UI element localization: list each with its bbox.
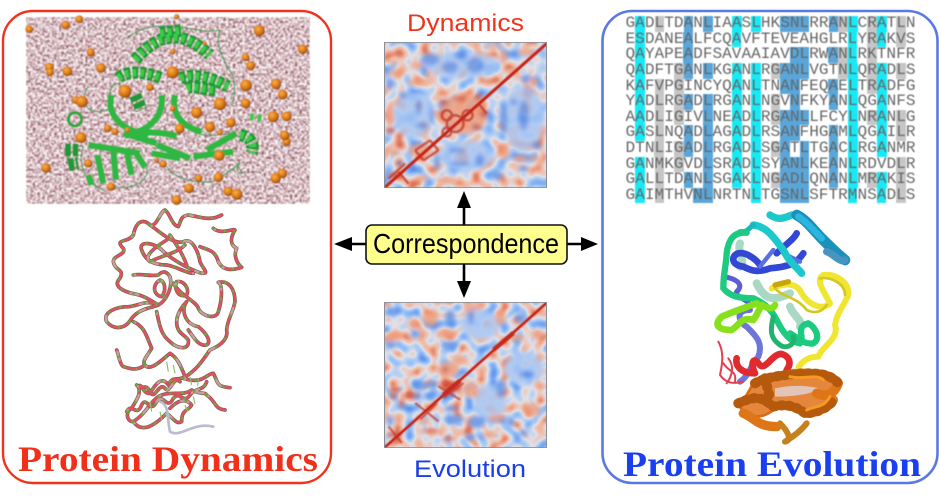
sequence alignment with conservation highlighting: L [654, 139, 664, 157]
sequence alignment with conservation highlighting: L [848, 92, 858, 110]
sequence alignment with conservation highlighting: L [896, 108, 906, 126]
sequence alignment with conservation highlighting: N [838, 61, 848, 79]
sequence alignment with conservation highlighting: A [732, 30, 741, 48]
sequence alignment with conservation highlighting: S [635, 30, 645, 48]
sequence alignment with conservation highlighting: ADL [780, 170, 809, 188]
image: protein backbone ensemble with green side chains [106, 210, 242, 433]
sequence alignment with conservation highlighting: G I THV NRTN TG SFTR NS D S [626, 186, 915, 204]
sequence alignment with conservation highlighting: G D TD N IA S HK RR C T N [626, 14, 916, 32]
sequence alignment with conservation highlighting: A [877, 77, 887, 95]
sequence alignment with conservation highlighting: A [780, 139, 790, 157]
sequence alignment with conservation highlighting: L [751, 139, 761, 157]
sequence alignment with conservation highlighting: A [635, 108, 645, 126]
sequence alignment with conservation highlighting: DTN I D RG D S T TG C RG NMR [626, 139, 916, 157]
sequence alignment with conservation highlighting: A [828, 45, 838, 63]
sequence alignment with conservation highlighting: L [751, 170, 761, 188]
sequence alignment with conservation highlighting: A [829, 14, 838, 32]
sequence alignment with conservation highlighting: A [635, 77, 645, 95]
sequence alignment with conservation highlighting: L [655, 92, 664, 110]
sequence alignment with conservation highlighting: L [751, 77, 761, 95]
sequence alignment with conservation highlighting: L [655, 108, 664, 126]
sequence alignment with conservation highlighting: A [829, 92, 838, 110]
sequence alignment with conservation highlighting: L [848, 77, 858, 95]
sequence alignment with conservation highlighting: L [848, 139, 858, 157]
label: Dynamics: Dynamics [407, 10, 524, 37]
panel: protein dynamics frame [3, 11, 331, 483]
sequence alignment with conservation highlighting: L [703, 139, 713, 157]
sequence alignment with conservation highlighting: A [877, 139, 887, 157]
sequence alignment with conservation highlighting: A [732, 92, 742, 110]
sequence alignment with conservation highlighting: G S NQ D AG D RS FHG M QG I R [626, 123, 916, 141]
sequence alignment with conservation highlighting: A [635, 45, 645, 63]
sequence alignment with conservation highlighting: Y D R D RG N N V FKY N QG NFS [626, 92, 916, 110]
sequence alignment with conservation highlighting: V [896, 30, 906, 48]
sequence alignment with conservation highlighting: A [732, 155, 742, 173]
sequence alignment with conservation highlighting: M [848, 186, 857, 204]
image: rainbow protein structure ensemble [718, 215, 848, 442]
sequence alignment with conservation highlighting: L [751, 108, 761, 126]
sequence alignment with conservation highlighting: G [771, 108, 780, 126]
sequence alignment with conservation highlighting: L [848, 108, 858, 126]
sequence alignment with conservation highlighting: R [867, 170, 877, 188]
sequence alignment with conservation highlighting: A [877, 170, 887, 188]
sequence alignment with conservation highlighting: A [684, 14, 693, 32]
sequence alignment with conservation highlighting: E DANE LFCQ VFTEVEAHGLR Y K S [626, 30, 915, 48]
sequence alignment with conservation highlighting: R [867, 108, 877, 126]
sequence alignment with conservation highlighting: A [732, 123, 742, 141]
sequence alignment with conservation highlighting: L [848, 30, 857, 48]
sequence alignment with conservation highlighting: L [800, 139, 809, 157]
sequence alignment with conservation highlighting: DL [790, 45, 809, 63]
sequence alignment with conservation highlighting: Q DFT N KG N R VGT Q D S [626, 61, 916, 79]
heatmap: evolution correlation matrix [384, 302, 547, 448]
sequence alignment with conservation highlighting: V [655, 77, 664, 95]
heatmap: dynamics correlation matrix [384, 42, 547, 188]
arrow: down [457, 263, 471, 298]
sequence alignment with conservation highlighting: L [703, 61, 713, 79]
sequence alignment with conservation highlighting: AN [780, 123, 800, 141]
sequence alignment with conservation highlighting: A [829, 170, 838, 188]
sequence alignment with conservation highlighting: A [732, 108, 742, 126]
sequence alignment with conservation highlighting: A [635, 155, 645, 173]
sequence alignment with conservation highlighting: A [732, 14, 742, 32]
sequence alignment with conservation highlighting: G [771, 170, 780, 188]
sequence alignment with conservation highlighting: A D I IV NE D R LFCY N N G [626, 108, 916, 126]
sequence alignment with conservation highlighting: A [684, 170, 693, 188]
sequence alignment with conservation highlighting: A [635, 14, 645, 32]
sequence alignment with conservation highlighting: L [751, 123, 761, 141]
sequence alignment with conservation highlighting: AN [780, 77, 800, 95]
sequence alignment with conservation highlighting: L [896, 14, 906, 32]
arrow: up [457, 191, 471, 226]
sequence alignment with conservation highlighting [625, 14, 916, 204]
sequence alignment with conservation highlighting: A [828, 77, 838, 95]
sequence alignment with conservation highlighting: A [732, 61, 742, 79]
sequence alignment with conservation highlighting: A [635, 123, 645, 141]
sequence alignment with conservation highlighting: I [896, 170, 906, 188]
callout: Correspondence: Correspondence [373, 228, 559, 259]
sequence alignment with conservation highlighting: G N K VD SR D SY KE N RDVD R [626, 155, 916, 173]
sequence alignment with conservation highlighting: L [703, 14, 713, 32]
arrow: right [566, 237, 598, 251]
sequence alignment with conservation highlighting: G L TD N SG K N QN N M K S [626, 170, 916, 188]
sequence alignment with conservation highlighting: G [674, 77, 684, 95]
sequence alignment with conservation highlighting: N [838, 14, 848, 32]
sequence alignment with conservation highlighting: K F P INCYQ N TN FEQ E T DFG [626, 77, 916, 95]
sequence alignment with conservation highlighting: L [848, 14, 858, 32]
sequence alignment with conservation highlighting: A [684, 61, 693, 79]
sequence alignment with conservation highlighting: A [829, 155, 838, 173]
sequence alignment with conservation highlighting: A [877, 123, 887, 141]
sequence alignment with conservation highlighting: L [848, 170, 858, 188]
sequence alignment with conservation highlighting: L [703, 92, 713, 110]
sequence alignment with conservation highlighting: L [896, 155, 906, 173]
sequence alignment with conservation highlighting: A [732, 77, 742, 95]
sequence alignment with conservation highlighting: L [896, 186, 906, 204]
sequence alignment with conservation highlighting: L [848, 123, 858, 141]
sequence alignment with conservation highlighting: L [751, 186, 761, 204]
sequence alignment with conservation highlighting: A [877, 186, 886, 204]
sequence alignment with conservation highlighting: G [771, 92, 780, 110]
sequence alignment with conservation highlighting: G [674, 61, 684, 79]
sequence alignment with conservation highlighting: A [684, 139, 693, 157]
sequence alignment with conservation highlighting: Q YAPE DFSAVAAIAV RW R TNFR [626, 45, 915, 63]
sequence alignment with conservation highlighting: G [771, 61, 780, 79]
image: solvated protein with ions [25, 14, 310, 205]
sequence alignment with conservation highlighting: L [703, 108, 713, 126]
sequence alignment with conservation highlighting: ANL [780, 155, 809, 173]
sequence alignment with conservation highlighting: R [867, 61, 877, 79]
sequence alignment with conservation highlighting: L [751, 14, 761, 32]
sequence alignment with conservation highlighting: A [635, 186, 645, 204]
sequence alignment with conservation highlighting: A [683, 45, 693, 63]
sequence alignment with conservation highlighting: A [635, 170, 645, 188]
sequence alignment with conservation highlighting: A [877, 30, 886, 48]
sequence alignment with conservation highlighting: N [790, 92, 800, 110]
sequence alignment with conservation highlighting: L [848, 45, 857, 63]
sequence alignment with conservation highlighting: L [655, 123, 664, 141]
sequence alignment with conservation highlighting: M [655, 155, 664, 173]
sequence alignment with conservation highlighting: L [751, 92, 761, 110]
sequence alignment with conservation highlighting: A [877, 61, 887, 79]
sequence alignment with conservation highlighting: A [635, 92, 645, 110]
sequence alignment with conservation highlighting: A [683, 30, 693, 48]
title: Protein Dynamics: Protein Dynamics [18, 439, 318, 479]
sequence alignment with conservation highlighting: A [877, 92, 887, 110]
sequence alignment with conservation highlighting: A [732, 139, 742, 157]
sequence alignment with conservation highlighting: L [655, 14, 664, 32]
sequence alignment with conservation highlighting: G [674, 139, 684, 157]
sequence alignment with conservation highlighting: ANL [780, 61, 809, 79]
sequence alignment with conservation highlighting: SNL [780, 186, 809, 204]
sequence alignment with conservation highlighting: G [674, 92, 684, 110]
sequence alignment with conservation highlighting: M [655, 186, 664, 204]
arrow: left [334, 237, 367, 251]
sequence alignment with conservation highlighting: SNL [780, 14, 809, 32]
sequence alignment with conservation highlighting: L [896, 61, 906, 79]
sequence alignment with conservation highlighting: L [703, 155, 713, 173]
sequence alignment with conservation highlighting: N [838, 45, 848, 63]
sequence alignment with conservation highlighting: A [829, 123, 838, 141]
sequence alignment with conservation highlighting: G [674, 108, 684, 126]
sequence alignment with conservation highlighting: G [771, 139, 780, 157]
sequence alignment with conservation highlighting: G [674, 155, 684, 173]
sequence alignment with conservation highlighting: A [684, 92, 693, 110]
sequence alignment with conservation highlighting: L [848, 61, 858, 79]
sequence alignment with conservation highlighting: A [877, 14, 887, 32]
sequence alignment with conservation highlighting: L [848, 155, 858, 173]
sequence alignment with conservation highlighting: L [703, 123, 713, 141]
sequence alignment with conservation highlighting: R [867, 77, 877, 95]
sequence alignment with conservation highlighting: R [867, 30, 877, 48]
title: Protein Evolution: Protein Evolution [623, 444, 921, 484]
sequence alignment with conservation highlighting: L [703, 170, 713, 188]
panel: protein evolution frame [602, 11, 938, 483]
sequence alignment with conservation highlighting: L [896, 123, 906, 141]
sequence alignment with conservation highlighting: ANL [780, 108, 809, 126]
label: Evolution: Evolution [414, 456, 526, 483]
sequence alignment with conservation highlighting: A [877, 108, 887, 126]
sequence alignment with conservation highlighting: L [751, 61, 761, 79]
sequence alignment with conservation highlighting: K [867, 45, 877, 63]
sequence alignment with conservation highlighting: NL [693, 186, 712, 204]
sequence alignment with conservation highlighting: L [751, 155, 761, 173]
sequence alignment with conservation highlighting: A [635, 61, 645, 79]
sequence alignment with conservation highlighting: A [829, 139, 838, 157]
sequence alignment with conservation highlighting: A [684, 123, 693, 141]
sequence alignment with conservation highlighting: A [732, 170, 742, 188]
sequence alignment with conservation highlighting: L [655, 170, 664, 188]
sequence alignment with conservation highlighting: R [867, 14, 877, 32]
